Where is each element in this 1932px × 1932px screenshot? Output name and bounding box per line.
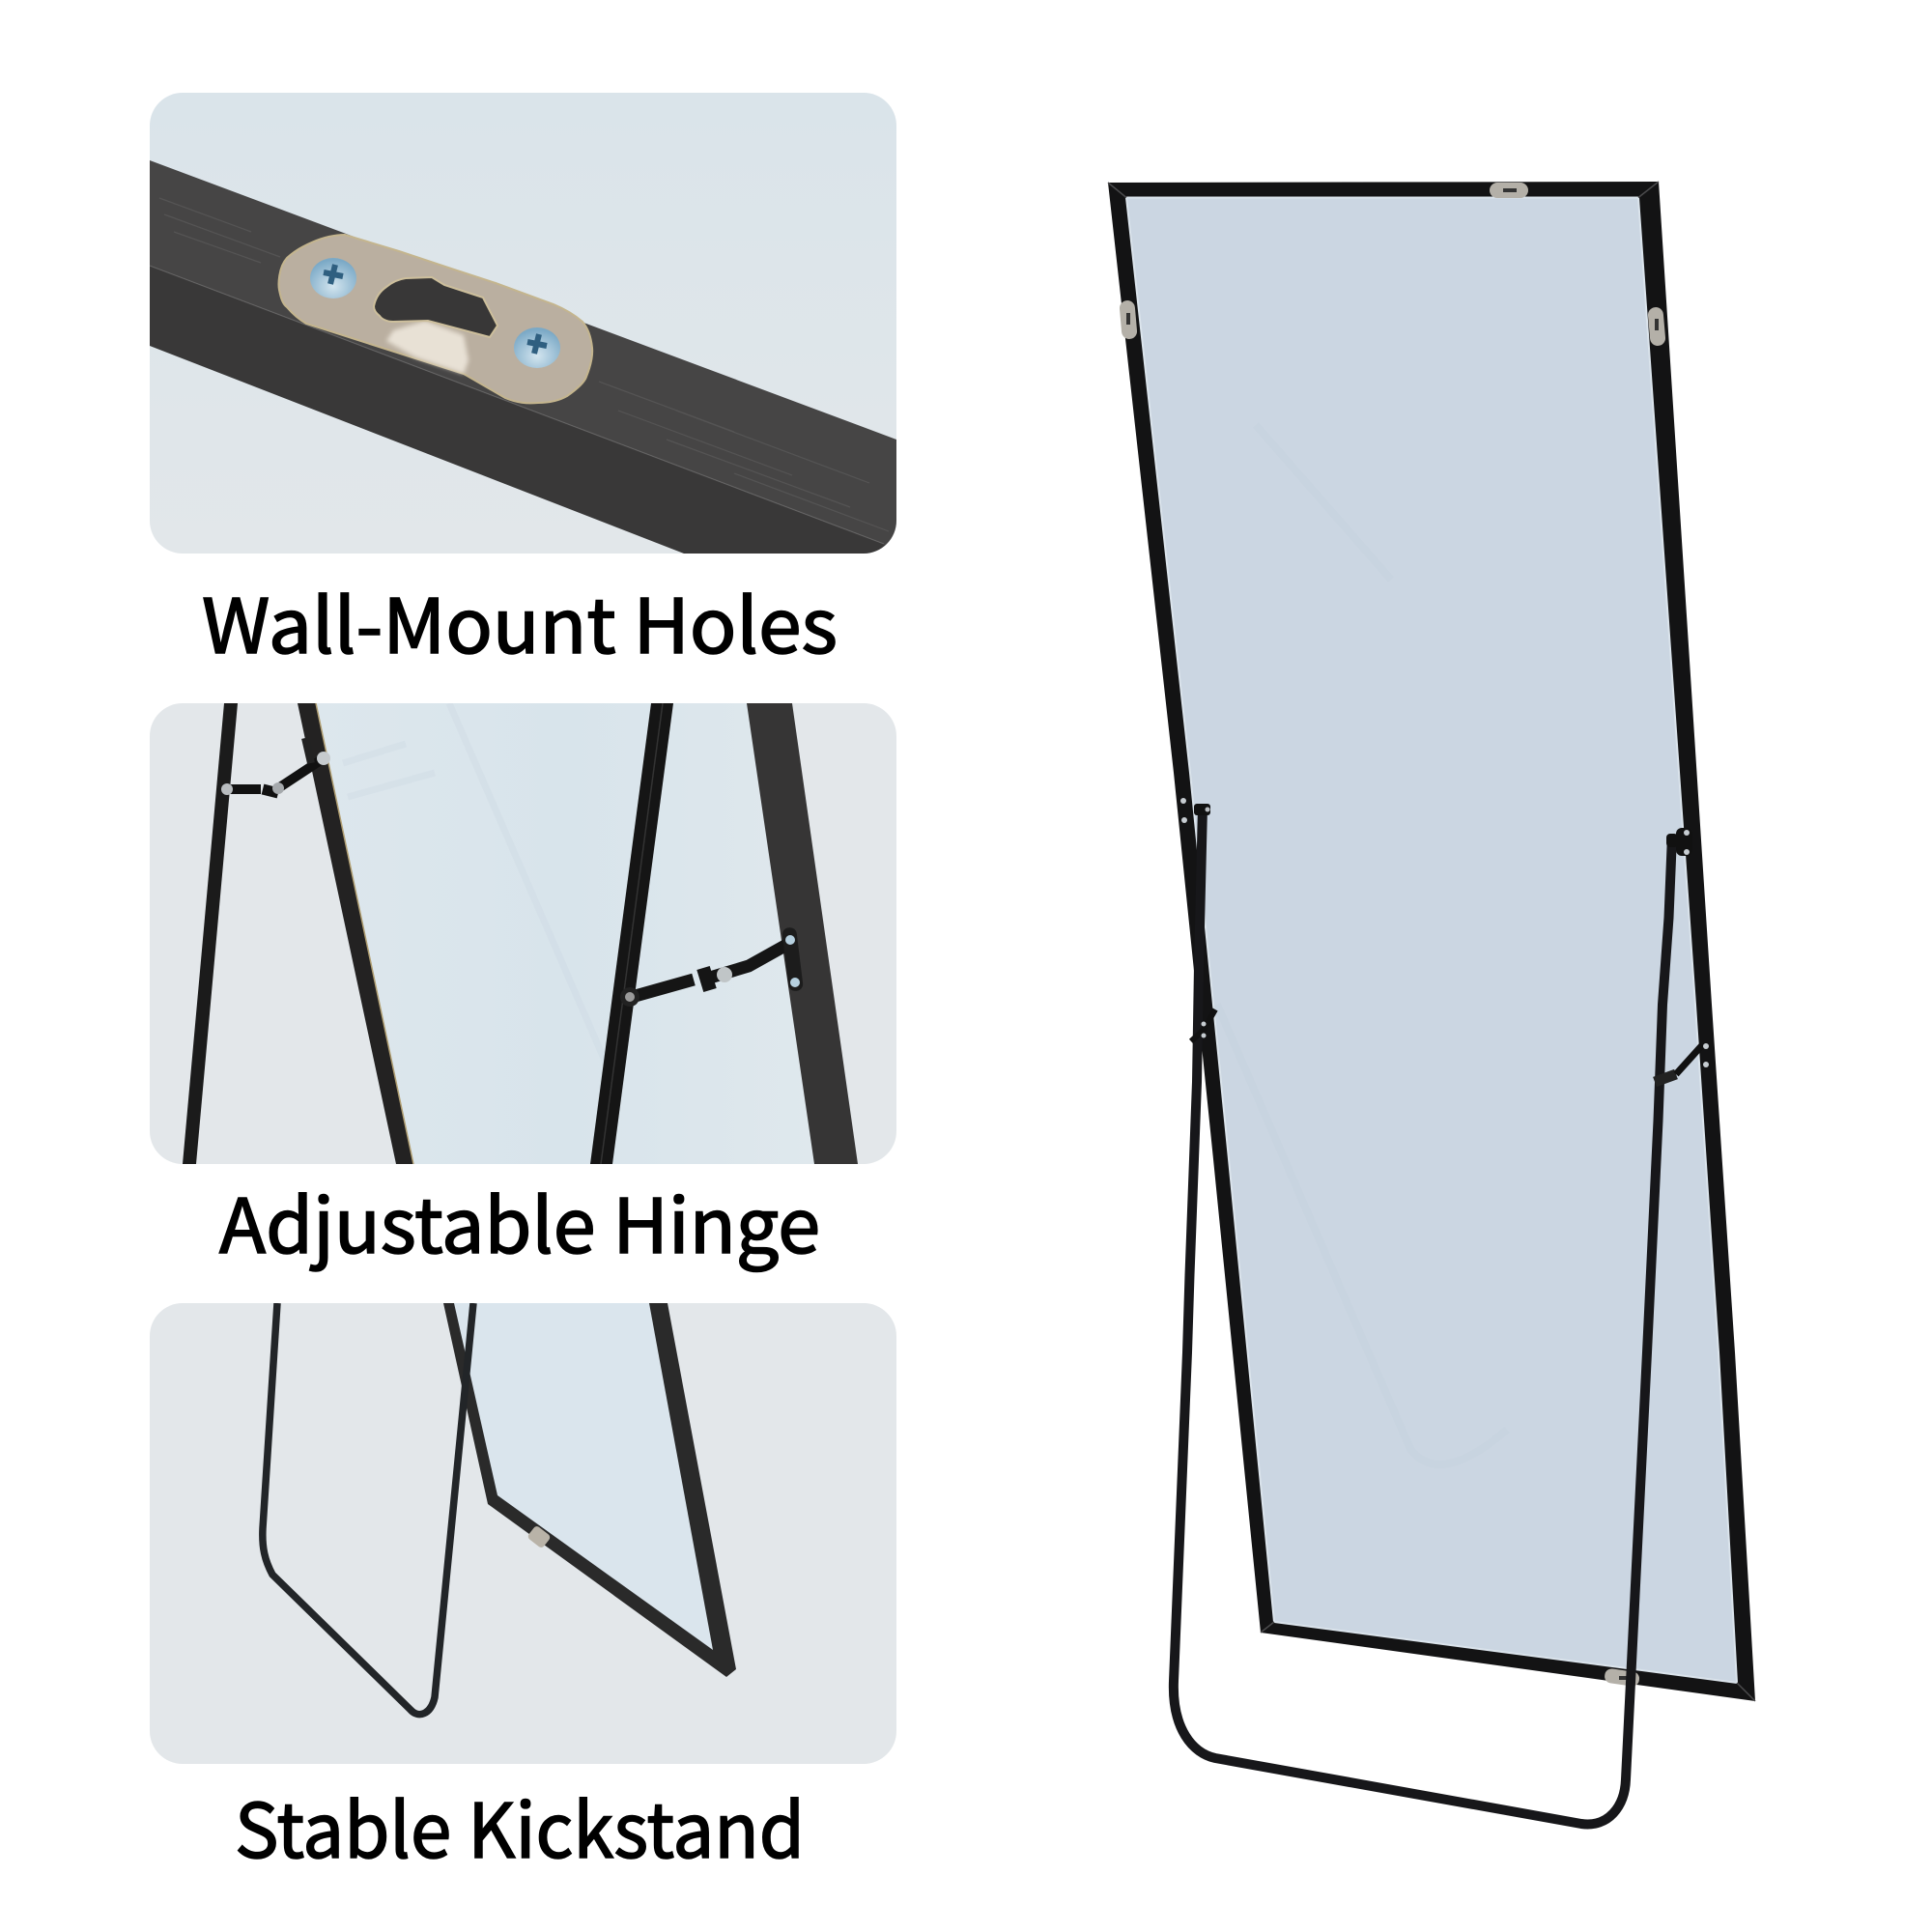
keyhole bracket [279,235,592,403]
screw left [310,258,356,298]
mirror frame [443,1303,736,1677]
top left hinge [1180,798,1210,823]
bottom bracket [527,1526,551,1548]
caption: Wall-Mount Holes: Wall-Mount Holes [202,567,838,675]
mirror left frame [298,703,413,1164]
mirror glass [454,1303,713,1650]
bracket highlight [386,321,469,374]
faint reflection [1217,425,1507,1464]
main mirror back view [1108,182,1755,1824]
caption: Stable Kickstand: Stable Kickstand [235,1772,805,1880]
right hinge [620,926,804,1007]
lower left hinge [1191,1009,1215,1041]
bottom bracket [1604,1668,1640,1687]
top bracket [1490,183,1528,198]
right bracket [1647,306,1666,347]
frame edge highlight [150,266,884,544]
panel: adjustable hinge photo [150,703,896,1164]
panel: wall-mount holes photo [150,93,908,565]
corner mitre lines [1108,182,1755,1701]
mirror edge trim [316,703,413,1164]
mirror glass [418,703,672,1164]
keyhole slot [374,277,497,337]
mirror right frame [747,703,858,1164]
top right hinge [1666,828,1692,856]
leg highlight [601,703,663,1164]
screw right [514,327,560,368]
stand left leg [183,703,238,1164]
kickstand tube [1174,807,1672,1824]
frame bar top face [150,160,896,560]
left hinge [221,738,330,795]
mirror glass [1126,197,1737,1683]
frame bar side face [150,266,908,565]
caption: Adjustable Hinge: Adjustable Hinge [219,1167,820,1275]
lower right hinge [1655,1043,1709,1082]
left bracket [1119,299,1138,340]
stand right leg [590,703,673,1164]
faint reflection [343,703,618,1092]
brushed metal lines [159,198,889,531]
mirror frame [1108,182,1755,1701]
kickstand tube [263,1303,473,1715]
panel: stable kickstand photo [150,1303,896,1764]
